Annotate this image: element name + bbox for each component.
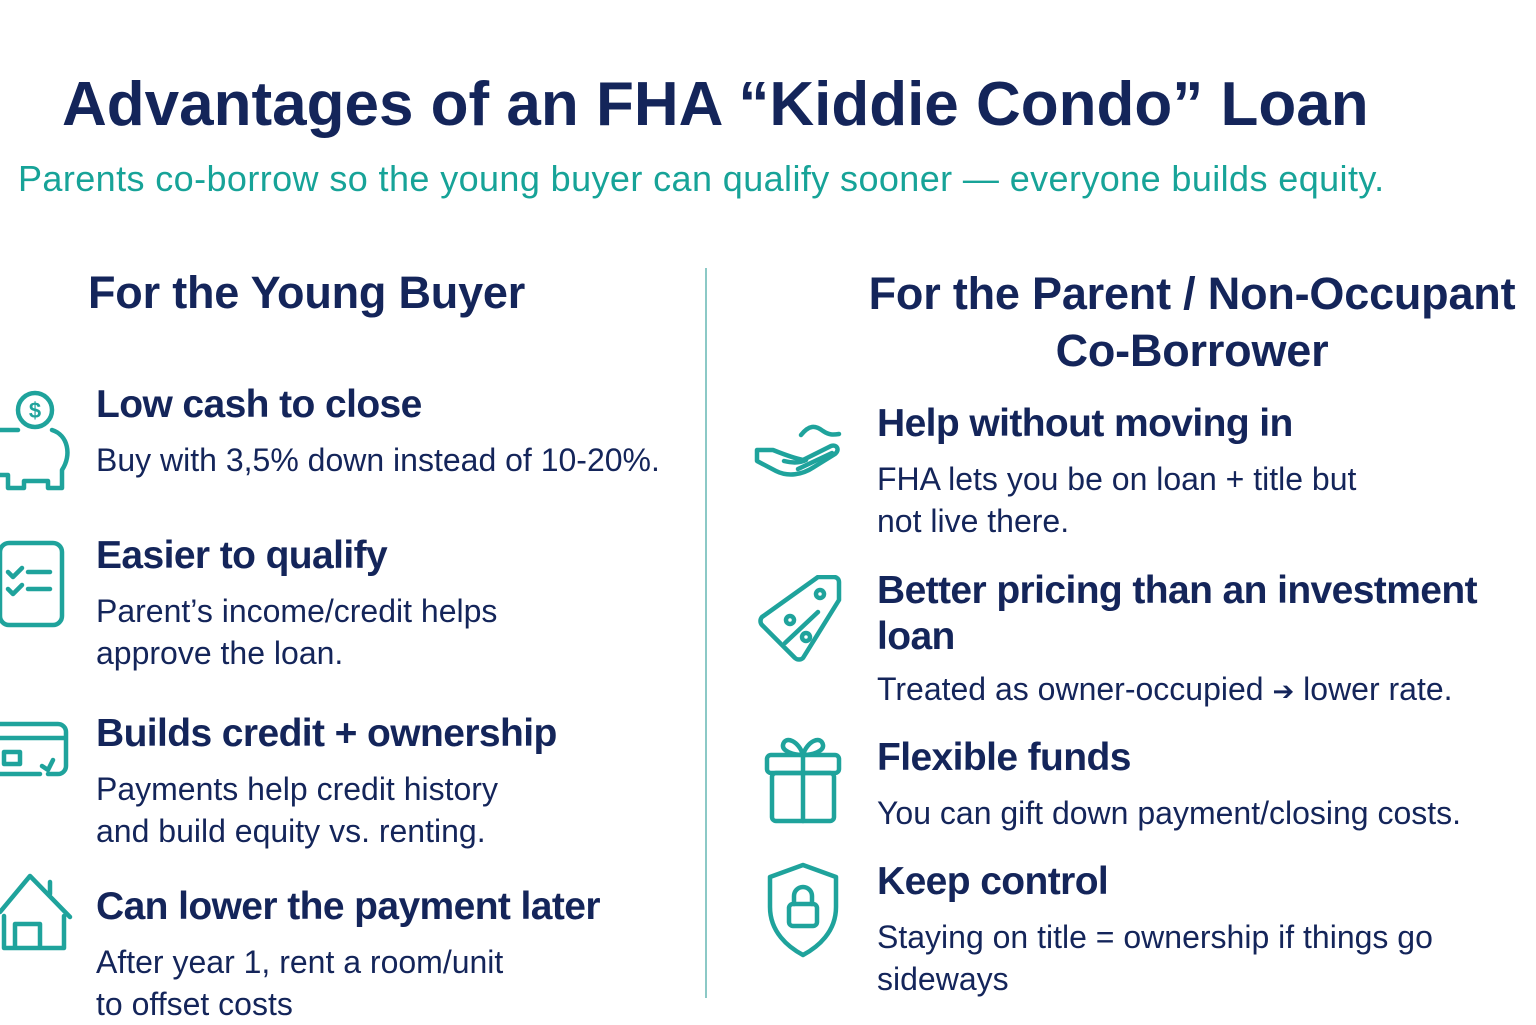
divider (705, 268, 707, 998)
icon: shield lock (768, 862, 838, 958)
item: low cash (96, 383, 660, 478)
item: help: FHA lets you be on loan + title but (877, 461, 1356, 497)
heading: young buyer: For the Young Buyer (88, 267, 525, 318)
item: control (877, 860, 1433, 997)
item: low cash: Low cash to close (96, 383, 422, 426)
heading: parent: Co-Borrower (1056, 325, 1328, 376)
item: pricing (877, 569, 1478, 707)
item: control: sideways (877, 961, 1009, 997)
icon: hand (754, 424, 842, 477)
item: credit: Payments help credit history (96, 771, 498, 807)
item: pricing: loan (877, 615, 955, 658)
item: help (877, 402, 1356, 539)
item: lower payment: Can lower the payment later (96, 885, 600, 928)
icon: house (0, 874, 72, 950)
item: lower payment: to offset costs (96, 986, 293, 1022)
item: qualify: approve the loan. (96, 635, 343, 671)
title: Advantages of an FHA “Kiddie Condo” Loan (62, 70, 1369, 139)
item: help: not live there. (877, 503, 1069, 539)
item: flexible: Flexible funds (877, 736, 1131, 779)
icon: price tag (758, 575, 842, 662)
icon: gift (764, 738, 842, 824)
icon: piggy bank: $ (29, 398, 41, 423)
item: flexible: You can gift down payment/closing costs. (877, 795, 1461, 831)
item: qualify (96, 534, 497, 671)
item: qualify: Easier to qualify (96, 534, 387, 577)
item: pricing: Treated as owner-occupied ➔ lower rate. (877, 671, 1453, 707)
item: qualify: Parent’s income/credit helps (96, 593, 497, 629)
item: control: Staying on title = ownership if things go (877, 919, 1433, 955)
item: lower payment: After year 1, rent a room/unit (96, 944, 503, 980)
item: credit (96, 712, 557, 849)
icon: checklist (0, 540, 64, 628)
heading: parent (869, 268, 1516, 376)
item: credit: Builds credit + ownership (96, 712, 557, 755)
item: flexible (877, 736, 1461, 831)
item: low cash: Buy with 3,5% down instead of 10-20%. (96, 442, 660, 478)
item: credit: and build equity vs. renting. (96, 813, 486, 849)
item: help: Help without moving in (877, 402, 1293, 445)
subtitle: Parents co-borrow so the young buyer can qualify sooner — everyone builds equity. (18, 158, 1384, 199)
heading: parent: For the Parent / Non-Occupant (869, 268, 1515, 319)
icon: credit card (0, 722, 68, 776)
item: lower payment (96, 885, 600, 1022)
item: control: Keep control (877, 860, 1108, 903)
icon: piggy bank (0, 390, 70, 490)
item: pricing: Better pricing than an investment (877, 569, 1477, 612)
